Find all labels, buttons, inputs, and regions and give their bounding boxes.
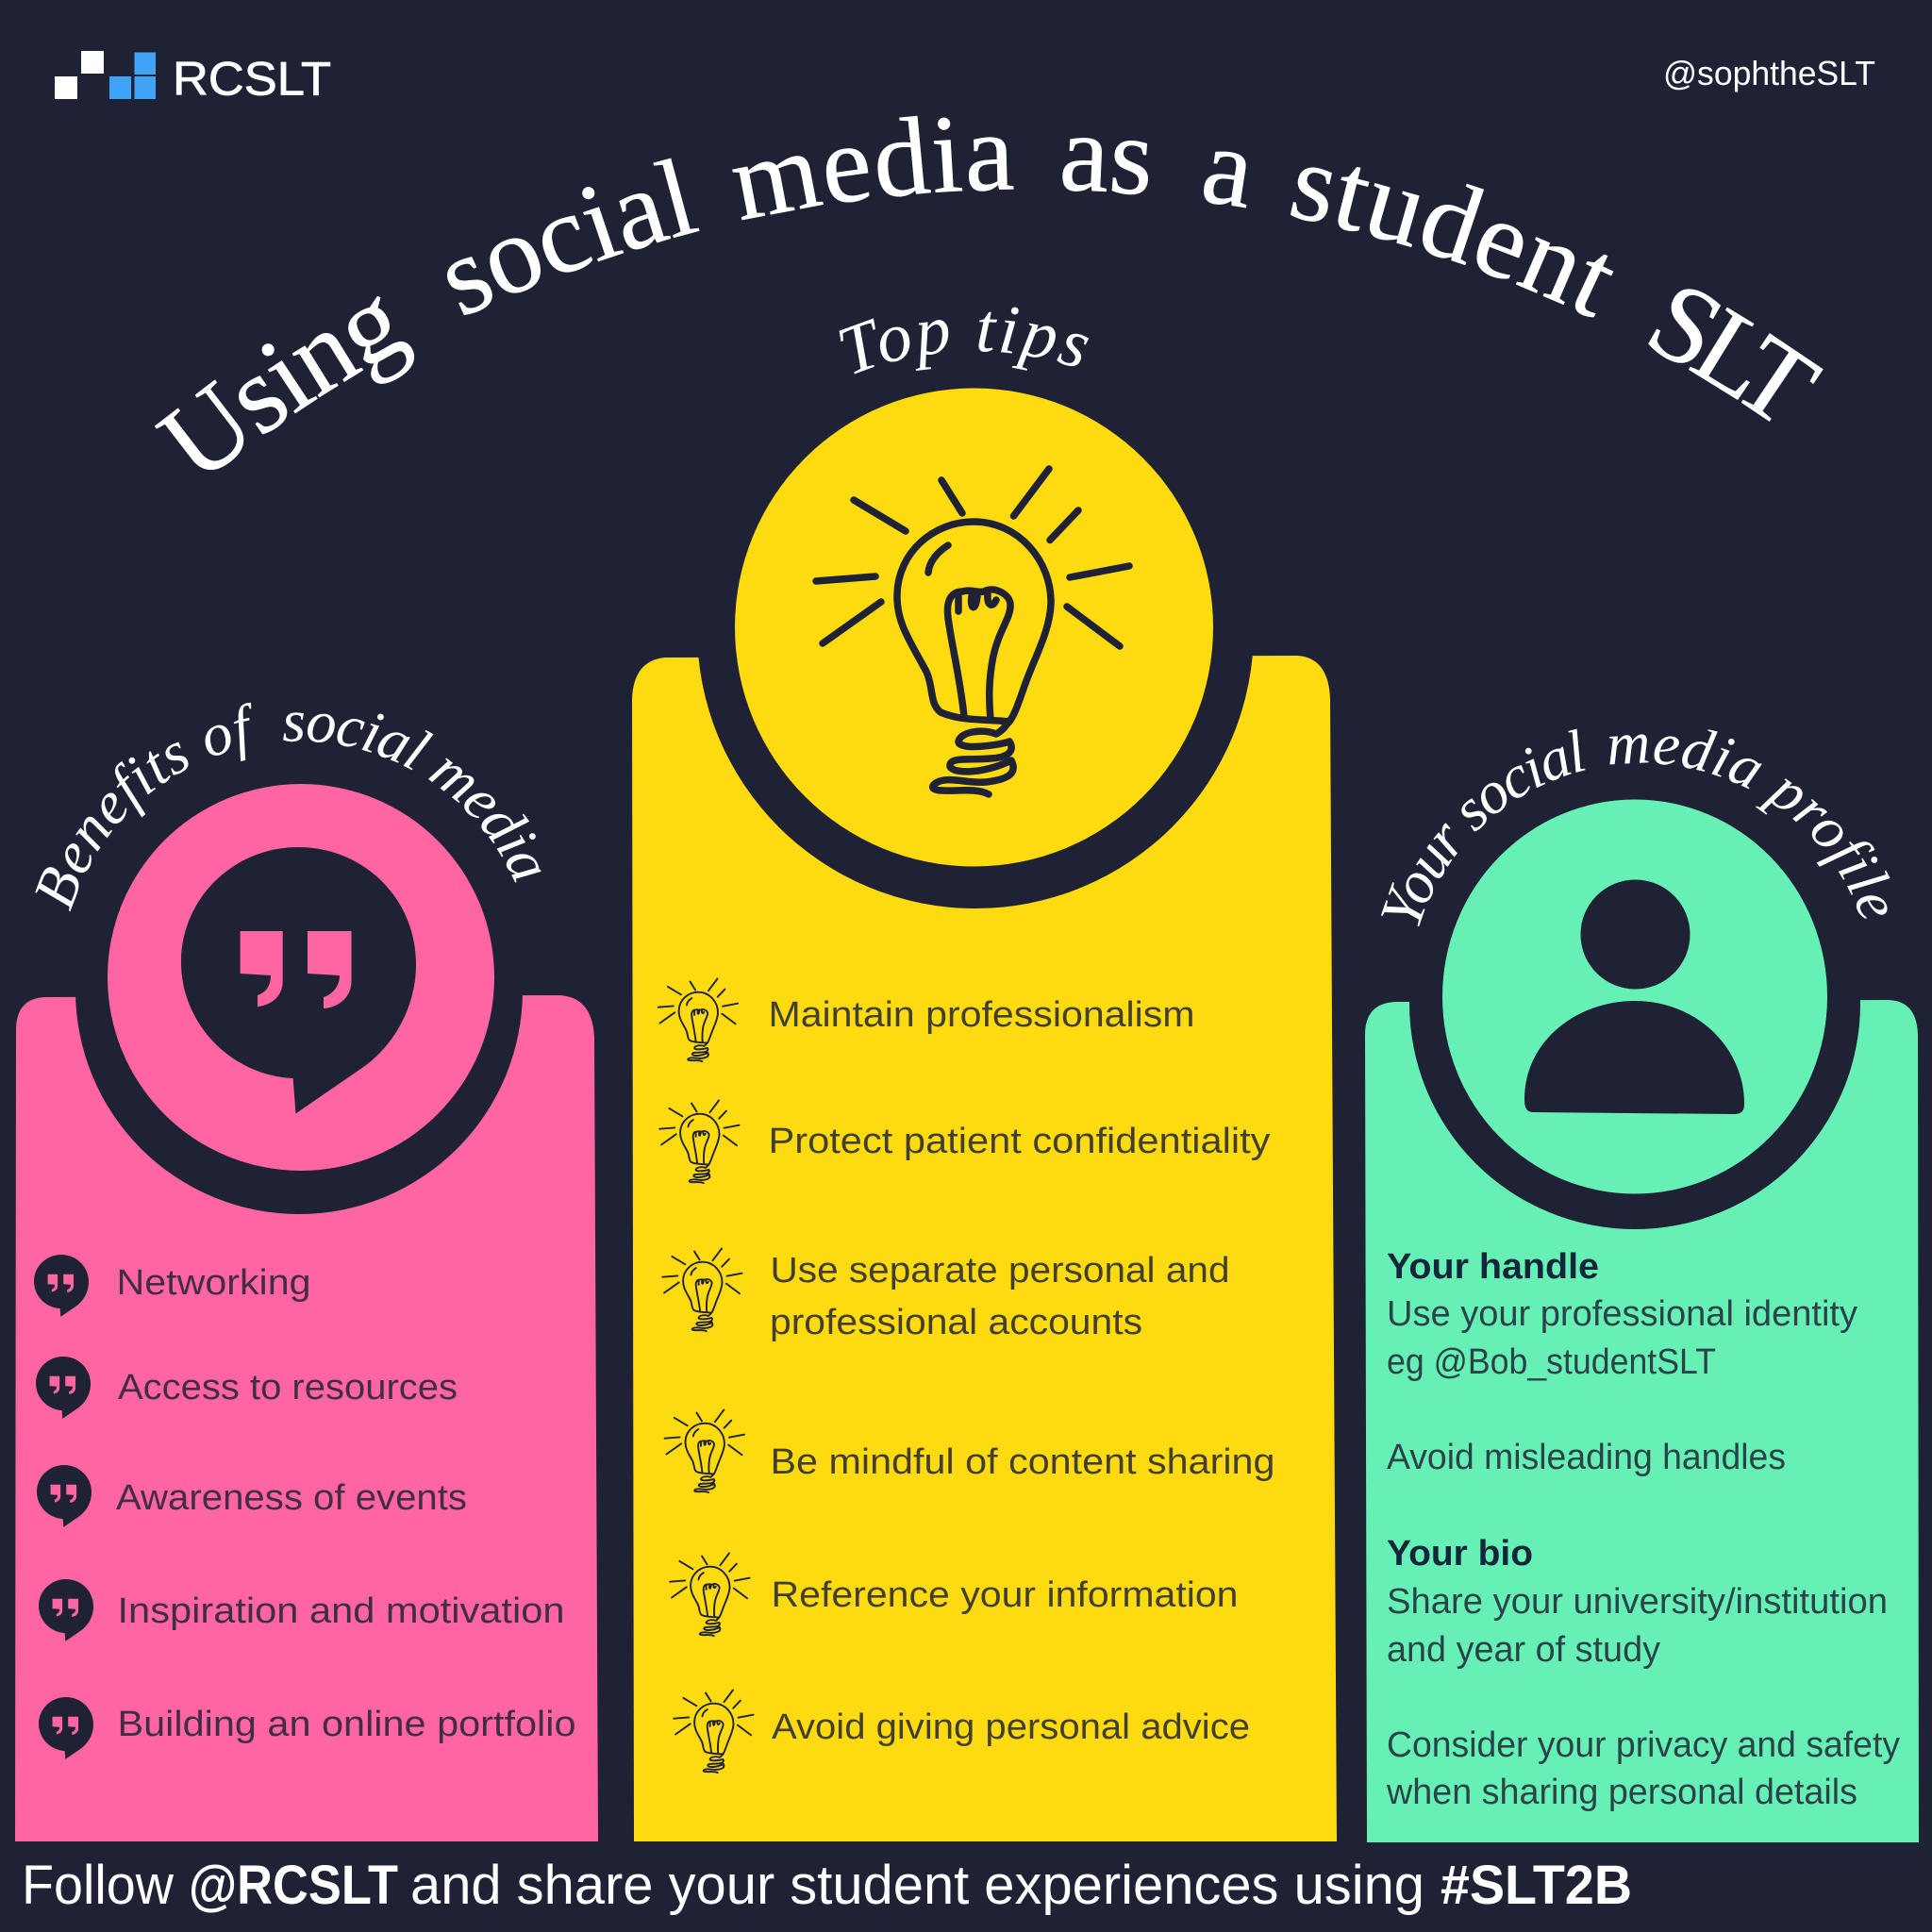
footer call to action: #SLT2B xyxy=(1441,1855,1632,1916)
author handle: @sophtheSLT xyxy=(1663,54,1875,92)
text block: your bio: and year of study xyxy=(1387,1630,1660,1670)
panel: top tips xyxy=(632,308,1337,1841)
text block: your bio: Share your university/institution xyxy=(1387,1582,1888,1622)
benefit 4 xyxy=(39,1579,564,1641)
text block: your bio xyxy=(1386,1534,1900,1812)
heading: top tips: Top tips xyxy=(840,308,1089,374)
tip 5 xyxy=(670,1554,1238,1636)
tip 4: Be mindful of content sharing xyxy=(770,1442,1275,1482)
pink circle xyxy=(108,784,494,1171)
tip 6: Avoid giving personal advice xyxy=(772,1707,1250,1747)
icon: large speech bubble xyxy=(181,847,416,1113)
benefit 4: Inspiration and motivation xyxy=(117,1591,564,1631)
panel body xyxy=(1365,1000,1919,1842)
text block: your handle xyxy=(1387,1247,1857,1477)
text block: your handle: Avoid misleading handles xyxy=(1387,1438,1786,1477)
text block: your handle: Your handle xyxy=(1387,1247,1599,1287)
ring cut-out xyxy=(697,352,1254,908)
footer call to action: Follow xyxy=(22,1855,175,1916)
tip 2 xyxy=(659,1101,1270,1183)
panel: your social media profile xyxy=(1365,728,1919,1842)
tip 2: Protect patient confidentiality xyxy=(768,1122,1270,1161)
benefit 5 xyxy=(39,1697,575,1759)
benefit 1: Networking xyxy=(117,1263,311,1303)
panel body xyxy=(15,995,598,1841)
text block: your bio: when sharing personal details xyxy=(1386,1773,1857,1812)
icon: person xyxy=(1524,879,1744,1114)
ring cut-out xyxy=(75,767,523,1214)
tip 5: Reference your information xyxy=(772,1575,1238,1615)
tip 1 xyxy=(658,979,1194,1061)
ring cut-out xyxy=(1409,778,1860,1229)
benefit 5: Building an online portfolio xyxy=(117,1705,575,1744)
heading: benefits of social media: Benefits of social media xyxy=(35,702,541,911)
text block: your handle: eg @Bob_studentSLT xyxy=(1387,1342,1716,1382)
tip 1: Maintain professionalism xyxy=(768,995,1194,1035)
tip 3 xyxy=(662,1249,1230,1342)
green circle xyxy=(1442,800,1827,1194)
tip 6 xyxy=(674,1690,1250,1773)
title: Usingsocialmedia as astudentSLT xyxy=(155,115,1824,470)
benefit 3: Awareness of events xyxy=(116,1478,467,1518)
text block: your bio: Your bio xyxy=(1387,1534,1533,1574)
yellow circle xyxy=(735,389,1213,866)
text block: your handle: Use your professional identity xyxy=(1387,1294,1857,1334)
tip 3: professional accounts xyxy=(770,1303,1142,1342)
logo: RCSLT: RCSLT xyxy=(173,53,331,106)
footer call to action: @RCSLT xyxy=(189,1855,398,1916)
panel: benefits of social media xyxy=(15,702,598,1841)
icon: large light bulb xyxy=(816,469,1129,794)
logo: RCSLT xyxy=(55,51,331,106)
panel body xyxy=(632,656,1337,1841)
footer call to action: and share your student experiences using xyxy=(410,1855,1424,1916)
heading: your social media profile: Your socialmedia profile xyxy=(1381,728,1890,926)
benefit 1 xyxy=(34,1255,311,1317)
benefit 2: Access to resources xyxy=(118,1368,458,1407)
tip 3: Use separate personal and xyxy=(770,1251,1230,1291)
benefit 2 xyxy=(36,1357,458,1419)
benefit 3 xyxy=(37,1465,467,1527)
tip 4 xyxy=(665,1410,1275,1492)
text block: your bio: Consider your privacy and safety xyxy=(1387,1725,1900,1765)
